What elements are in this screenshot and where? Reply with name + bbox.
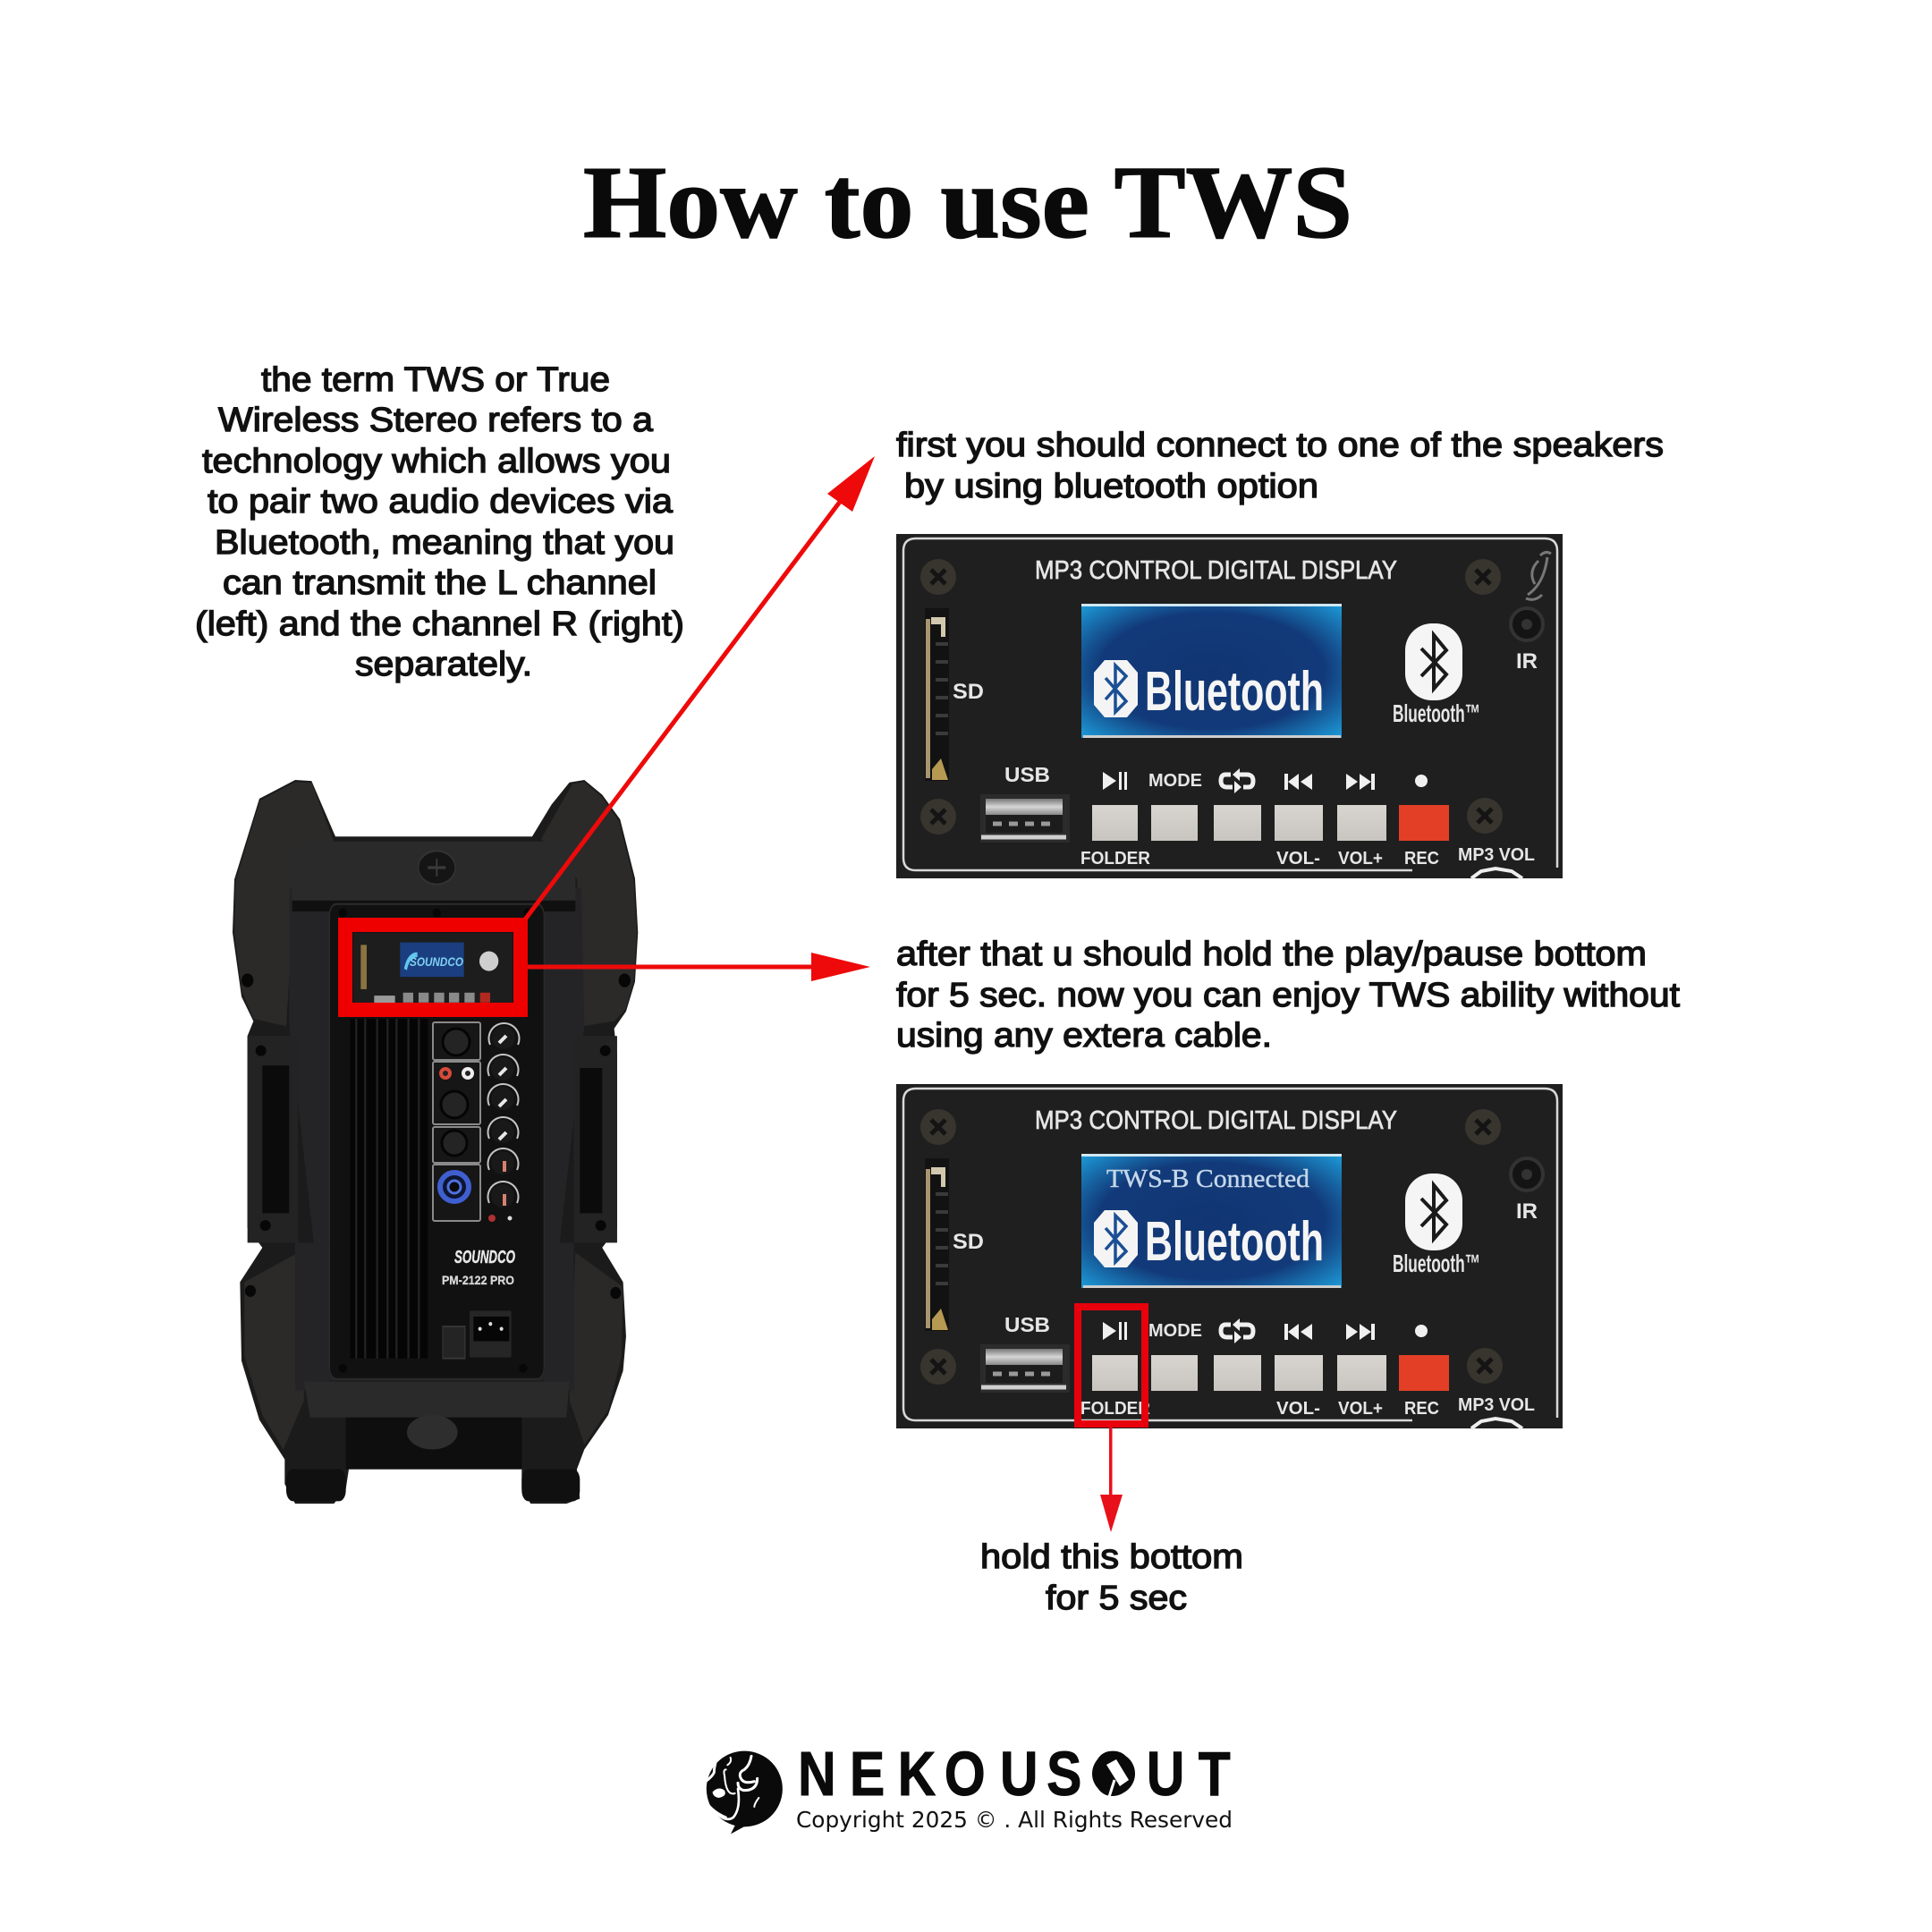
panel: MP3 display Bluetooth: SD [953, 680, 984, 704]
panel: MP3 display Bluetooth [896, 534, 1563, 878]
panel: MP3 display TWS connected: MP3 VOL [1458, 1395, 1535, 1415]
text block: TWS definition: (left) and the channel R (right) [195, 606, 684, 643]
panel: MP3 display TWS connected: USB [1004, 1313, 1050, 1336]
panel: MP3 display Bluetooth: VOL+ [1338, 849, 1383, 869]
arrow: speaker to step two [528, 953, 870, 981]
text block: step one: by using bluetooth option [904, 468, 1318, 505]
panel: MP3 display TWS connected: FOLDER [1080, 1399, 1151, 1419]
footer brand name: NEKOUSOUT [798, 1738, 1231, 1809]
panel: MP3 display TWS connected: SD [953, 1230, 984, 1254]
footer copyright: Copyright 2025 © . All Rights Reserved [796, 1807, 1233, 1833]
highlight box on play/pause button [1078, 1307, 1145, 1424]
text block: TWS definition: separately. [355, 646, 532, 683]
speaker rear photo illustration: SOUNDCO [454, 1248, 515, 1267]
panel: MP3 display Bluetooth: USB [1004, 763, 1050, 786]
panel: MP3 display TWS connected: VOL- [1276, 1399, 1320, 1419]
panel: MP3 display Bluetooth: Bluetooth™ [1393, 699, 1480, 727]
panel: MP3 display Bluetooth: IR [1516, 649, 1538, 674]
text block: step two: using any extera cable. [896, 1017, 1272, 1055]
panel: MP3 display Bluetooth: VOL- [1276, 849, 1320, 869]
text block: TWS definition: the term TWS or True [261, 361, 610, 399]
text block: step one: first you should connect to one of the speakers [896, 427, 1664, 464]
text block: step two [896, 936, 1680, 1055]
panel: MP3 display Bluetooth: MODE [1148, 771, 1202, 791]
highlight box on speaker display [345, 925, 521, 1010]
panel: MP3 display TWS connected: REC [1404, 1399, 1439, 1419]
panel: MP3 display TWS connected: Bluetooth [1145, 1211, 1324, 1273]
callout: hold this button: hold this bottom [980, 1538, 1243, 1576]
text block: TWS definition: Wireless Stereo refers to a [218, 402, 654, 439]
panel: MP3 display TWS connected: MODE [1148, 1321, 1202, 1341]
panel: MP3 display Bluetooth: Bluetooth [1145, 661, 1324, 723]
panel: MP3 display TWS connected: VOL+ [1338, 1399, 1383, 1419]
speaker rear photo illustration [233, 780, 638, 1504]
panel: MP3 display TWS connected: Bluetooth™ [1393, 1250, 1480, 1277]
connector modules [433, 1022, 480, 1221]
callout: hold this button: for 5 sec [1046, 1580, 1187, 1617]
arrow: speaker to step one [525, 456, 875, 919]
panel: MP3 display Bluetooth: FOLDER [1080, 849, 1151, 869]
text block: TWS definition: to pair two audio devices via [208, 483, 674, 521]
text block: TWS definition: technology which allows you [202, 443, 671, 480]
speaker rear photo illustration: SOUNDCO [410, 954, 463, 969]
text block: step two: for 5 sec. now you can enjoy TWS ability without [896, 977, 1680, 1014]
panel: MP3 display TWS connected: IR [1516, 1199, 1538, 1224]
speaker rear photo illustration: PM-2122 PRO [442, 1273, 514, 1287]
callout: hold this button [980, 1538, 1243, 1617]
text block: step two: after that u should hold the play/pause bottom [896, 936, 1647, 973]
panel: MP3 display Bluetooth: MP3 CONTROL DIGITAL DISPLAY [1035, 556, 1397, 585]
text block: step one [896, 427, 1664, 505]
text block: TWS definition: can transmit the L channel [223, 564, 657, 602]
text block: TWS definition [195, 361, 684, 683]
panel: MP3 display TWS connected: TWS-B Connected [1106, 1165, 1309, 1193]
arrow: button to callout [1100, 1428, 1123, 1532]
panel: MP3 display TWS connected [896, 1084, 1563, 1428]
panel: MP3 display TWS connected: MP3 CONTROL DIGITAL DISPLAY [1035, 1106, 1397, 1135]
knobs [491, 1026, 515, 1208]
title: How to use TWS [583, 146, 1352, 260]
panel: MP3 display Bluetooth: REC [1404, 849, 1439, 869]
panel: MP3 display Bluetooth: MP3 VOL [1458, 845, 1535, 865]
text block: TWS definition: Bluetooth, meaning that you [215, 524, 674, 562]
footer logo emblem [700, 1751, 783, 1834]
